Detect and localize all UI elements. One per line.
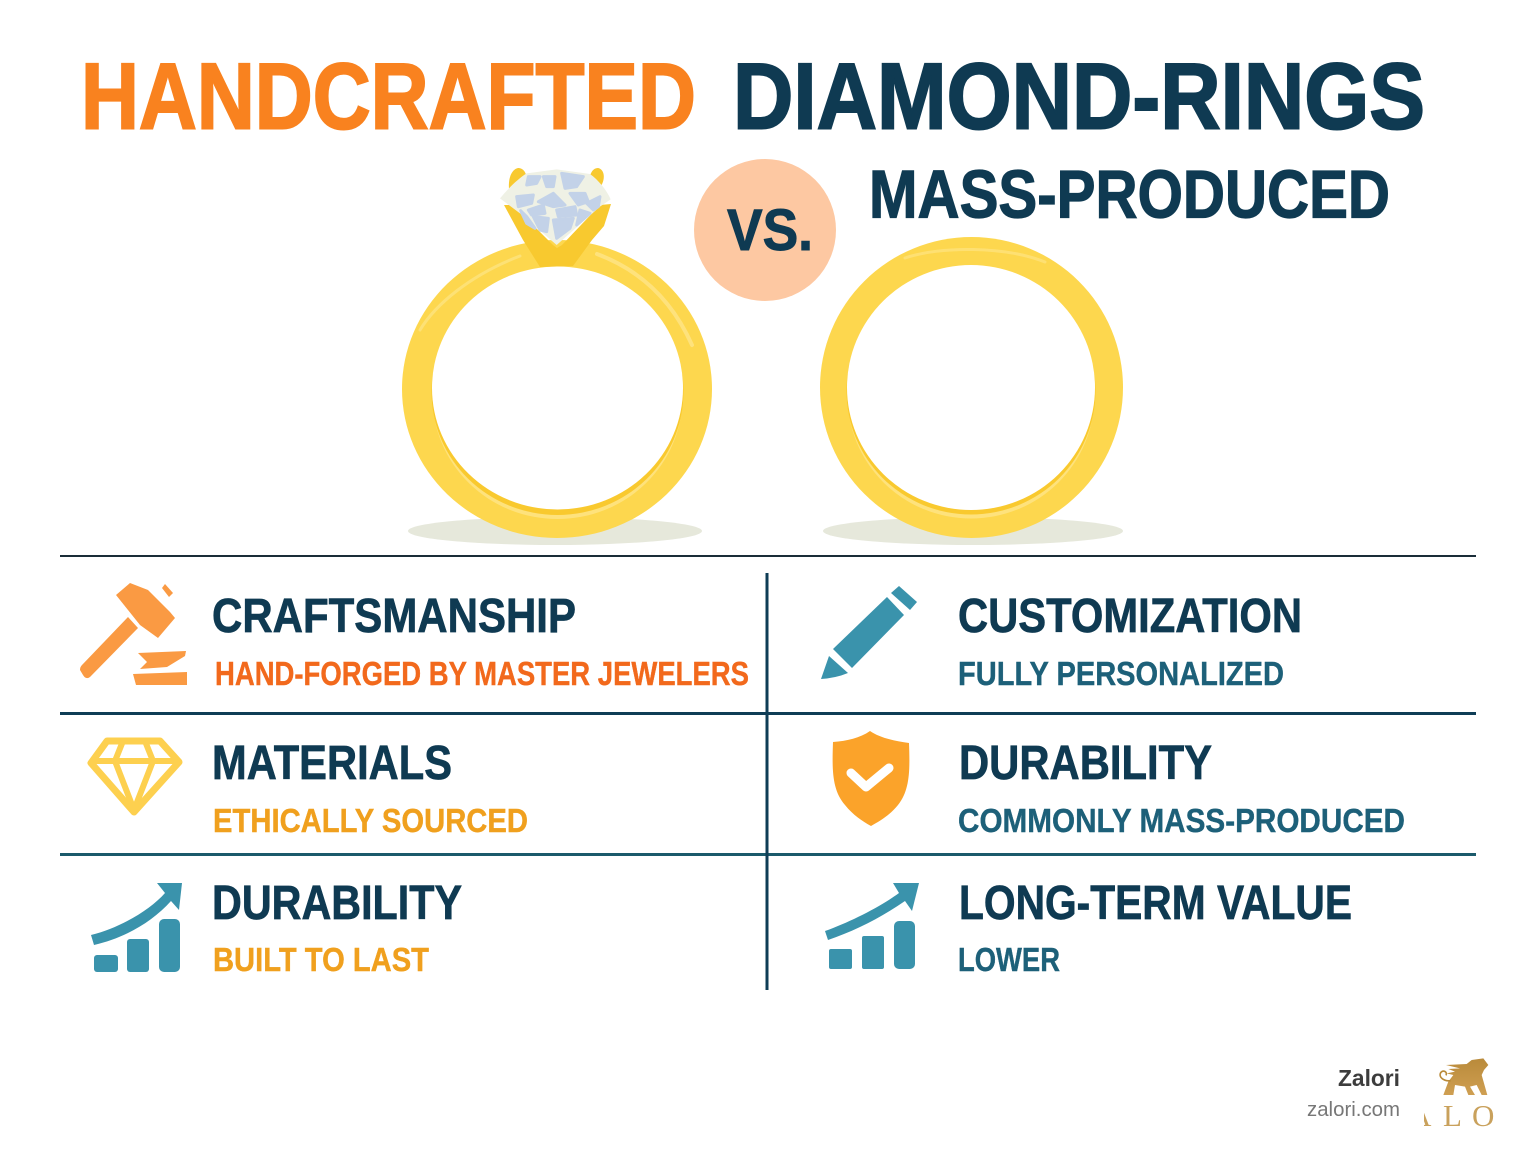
title: HANDCRAFTED (81, 44, 696, 148)
logo: wordmark (1424, 1106, 1494, 1126)
logo: gold lion (1440, 1058, 1488, 1095)
logo: wordmark: L (1443, 1098, 1462, 1133)
brand name: Zalori (1338, 1065, 1400, 1091)
brand name: zalori.com (1307, 1099, 1400, 1121)
brand name (1307, 1065, 1400, 1121)
row: materials: MATERIALS (212, 737, 452, 790)
row: durability (mass-produced): DURABILITY (959, 737, 1212, 790)
row: durability (handcrafted) (91, 877, 462, 978)
title (81, 44, 1425, 148)
row: customization: FULLY PERSONALIZED (958, 655, 1284, 692)
row: craftsmanship: HAND-FORGED BY MASTER JEWELERS (215, 655, 749, 692)
row: materials (91, 737, 528, 839)
logo: wordmark: A (1409, 1098, 1432, 1133)
row: customization: CUSTOMIZATION (958, 590, 1302, 643)
table grid lines (60, 555, 1476, 990)
title: DIAMOND-RINGS (733, 44, 1425, 148)
icon: hammer and anvil (80, 583, 187, 685)
ring: handcrafted diamond ring (402, 168, 712, 545)
icon: growth chart (825, 883, 919, 969)
row: customization (821, 586, 1302, 692)
vs badge (694, 159, 836, 301)
icon: diamond (91, 741, 179, 812)
row: long-term value: LONG-TERM VALUE (959, 877, 1352, 930)
row: materials: ETHICALLY SOURCED (213, 802, 528, 839)
row: craftsmanship: CRAFTSMANSHIP (212, 590, 576, 643)
icon: growth chart (91, 883, 182, 972)
row: durability (mass-produced) (833, 731, 1405, 839)
ring: plain gold band (820, 237, 1123, 545)
row: craftsmanship (80, 583, 749, 692)
heading: mass-produced: MASS-PRODUCED (869, 156, 1390, 232)
row: durability (mass-produced): COMMONLY MASS-PRODUCED (958, 802, 1405, 839)
ring setting (504, 168, 611, 267)
row: long-term value (825, 877, 1352, 978)
icon: shield with check (833, 731, 909, 826)
row: long-term value: LOWER (958, 941, 1060, 978)
diamond (500, 169, 611, 245)
row: durability (handcrafted): DURABILITY (212, 877, 462, 930)
row: durability (handcrafted): BUILT TO LAST (213, 941, 429, 978)
vs badge: VS. (727, 198, 813, 263)
icon: pencil (821, 586, 917, 679)
logo: wordmark: O (1472, 1098, 1494, 1133)
